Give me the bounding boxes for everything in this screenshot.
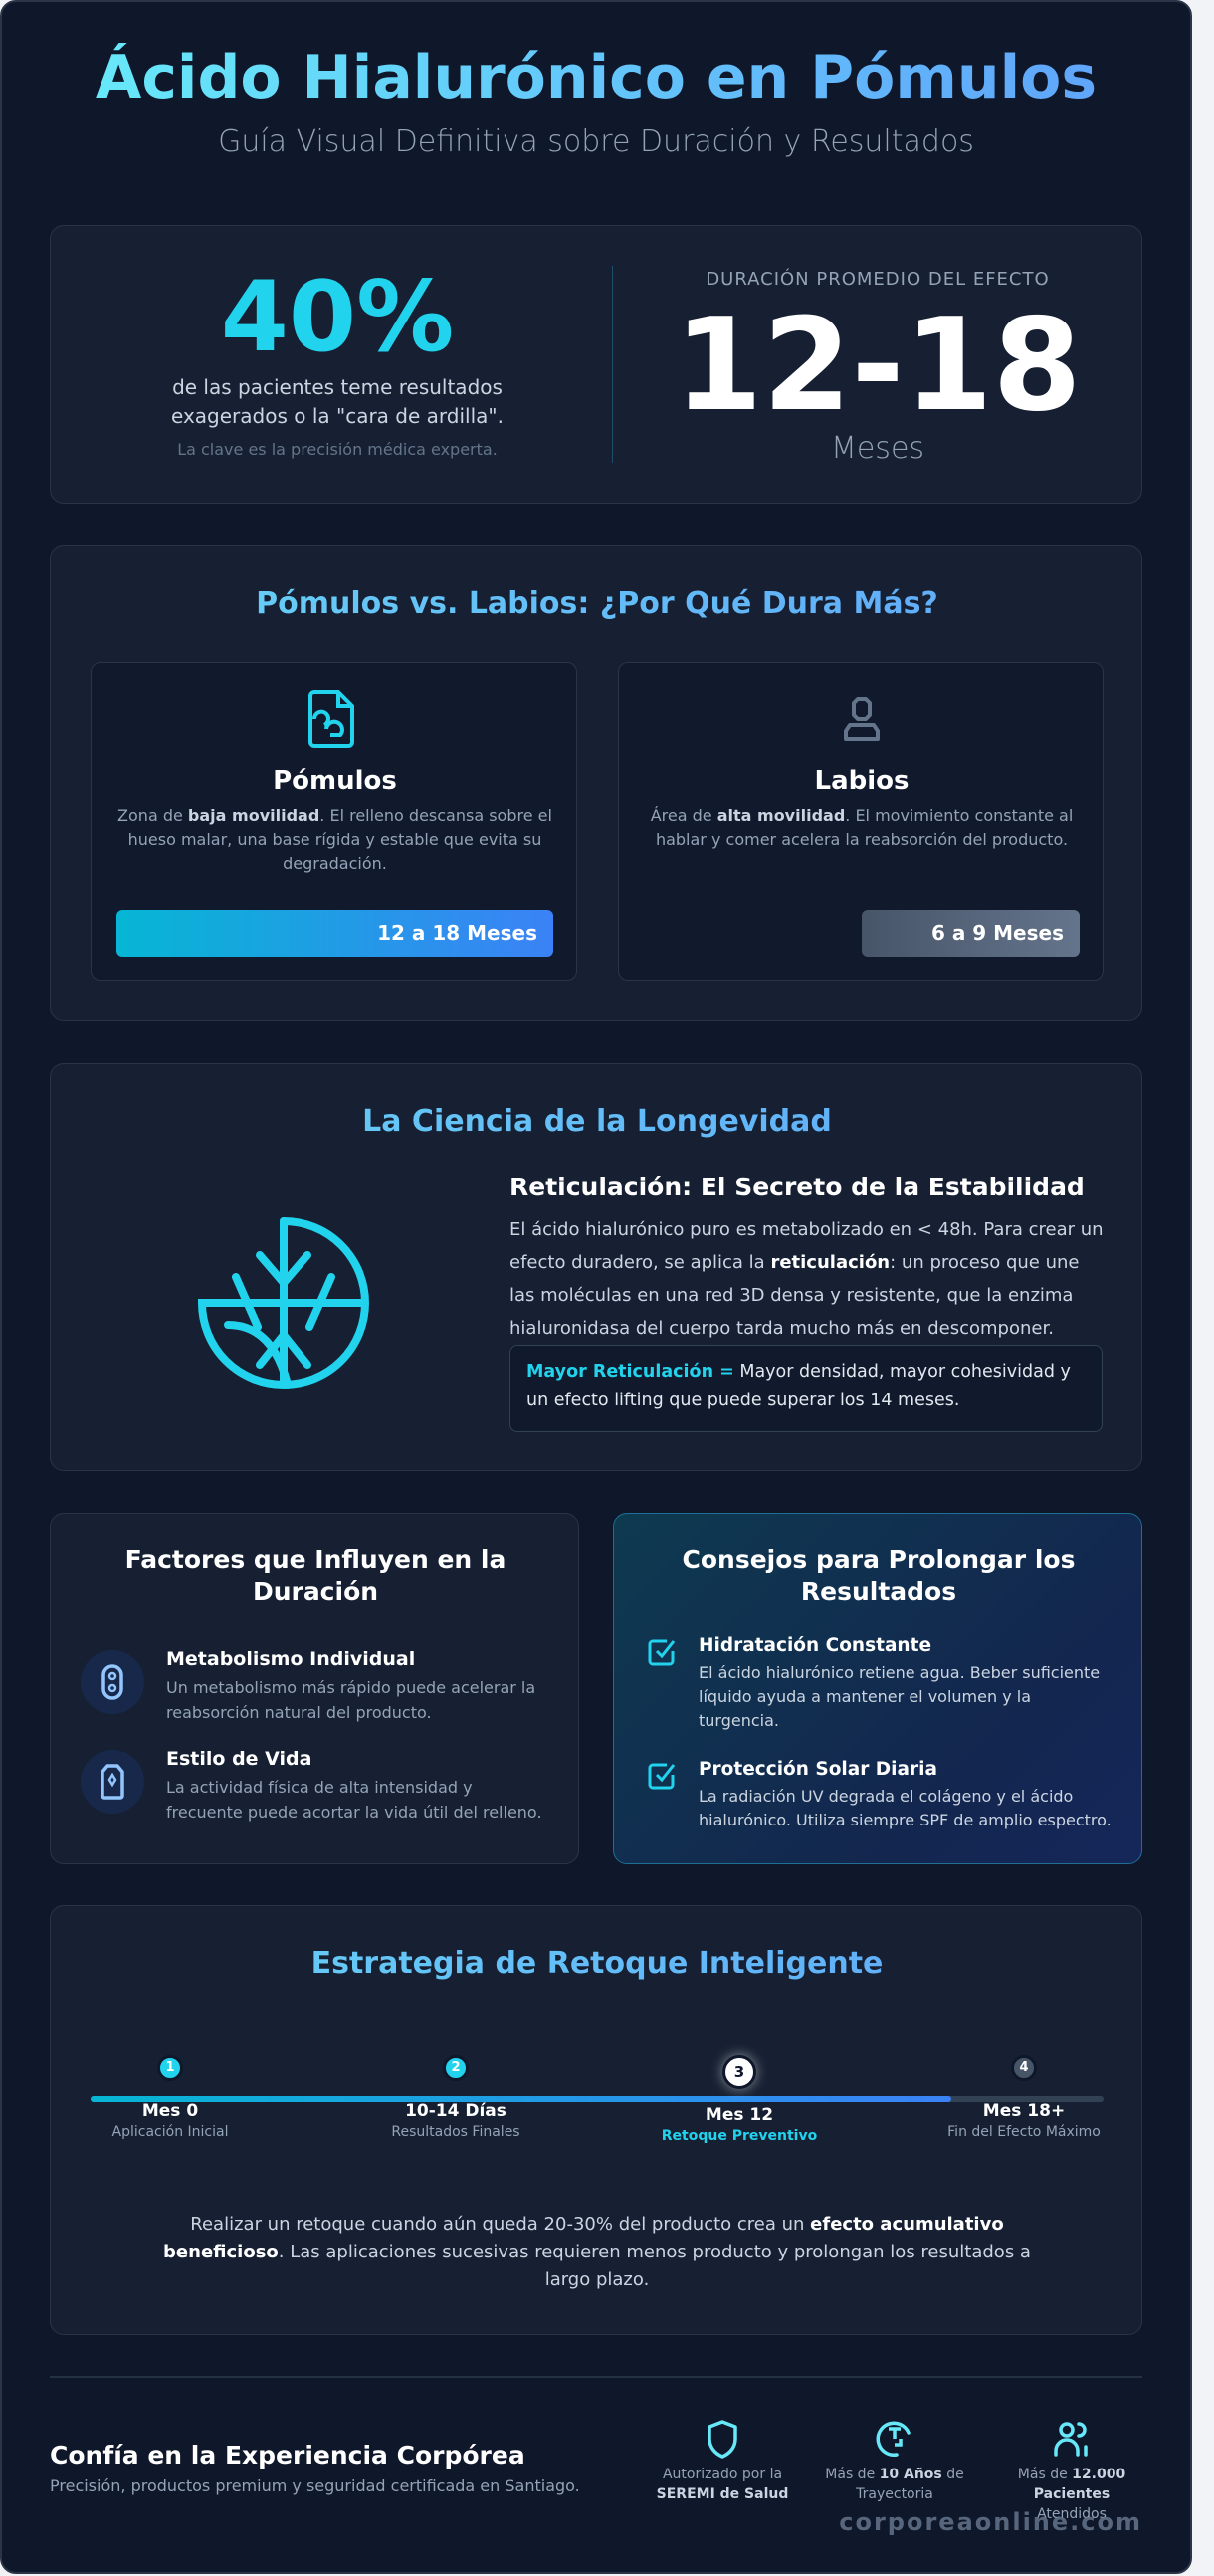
item: protección solar — [649, 1759, 1112, 1829]
item: estilo de vida: La actividad física de alta intensidad y frecuente puede acortar la vida útil del relleno. — [166, 1778, 542, 1822]
stat: 40%: exagerados o la "cara de ardilla". — [171, 404, 504, 428]
badge: 10 años: Trayectoria — [856, 2486, 933, 2502]
panel: cheeks vs lips — [50, 545, 1142, 1021]
step 3: Mes 12 — [706, 2105, 773, 2125]
badge: SEREMI — [657, 2420, 788, 2502]
icon: check — [649, 1764, 675, 1790]
stat: 40%: La clave es la precisión médica experta. — [177, 440, 498, 459]
badge: 12.000 pacientes — [1018, 2422, 1125, 2522]
heading: Pómulos — [273, 766, 397, 796]
heading: Labios — [814, 766, 909, 796]
step 4 — [947, 2055, 1101, 2140]
icon: metabolism — [81, 1650, 144, 1714]
badge: 12.000 pacientes: Atendidos — [1037, 2506, 1107, 2522]
panel: key stats — [50, 225, 1142, 504]
bar: 6 a 9 meses: 6 a 9 Meses — [931, 921, 1064, 945]
item: hidratación — [649, 1635, 1100, 1730]
stat: 12-18 months: DURACIÓN PROMEDIO DEL EFECTO — [706, 269, 1050, 290]
heading: Factores que Influyen en la Duración — [125, 1545, 506, 1606]
icon: snowflake/network — [198, 1217, 369, 1389]
heading: Pómulos vs. Labios: ¿Por Qué Dura Más? — [256, 586, 938, 621]
panel: science — [50, 1063, 1142, 1471]
paragraph: Realizar un retoque cuando aún queda 20-30% del producto crea un efecto acumulativo beneficioso. Las aplicaciones sucesivas requieren menos producto y prolongan los resultados a largo plazo. — [163, 2214, 1031, 2290]
description: Área de alta movilidad. El movimiento constante al hablar y comer acelera la reabsorción del producto. — [651, 806, 1073, 849]
icon: cheek file — [308, 690, 354, 748]
stat: 12-18 months: 12-18 — [674, 292, 1082, 440]
step 4: 4 — [1019, 2060, 1029, 2075]
title: Ácido Hialurónico en Pómulos — [96, 43, 1097, 112]
step 1: Mes 0 — [142, 2101, 198, 2121]
description: Zona de baja movilidad. El relleno descansa sobre el hueso malar, una base rígida y estable que evita su degradación. — [117, 806, 552, 873]
badge: 10 años — [825, 2421, 964, 2502]
paragraph: El ácido hialurónico puro es metabolizado en < 48h. Para crear un efecto duradero, se aplica la reticulación: un proceso que une las moléculas en una red 3D densa y resistente, que la enzima hialuronidasa del cuerpo tarda mucho más en descomponer. — [509, 1219, 1104, 1339]
badge: 12.000 pacientes: Pacientes — [1034, 2486, 1110, 2502]
panel: factors — [50, 1513, 579, 1864]
step 1: 1 — [165, 2060, 175, 2075]
card: pómulos — [91, 662, 577, 981]
step 2 — [391, 2055, 520, 2140]
panel: retouch strategy — [50, 1905, 1142, 2335]
item: metabolismo: Un metabolismo más rápido puede acelerar la reabsorción natural del producto. — [166, 1678, 535, 1722]
timeline — [91, 2048, 1104, 2144]
stat: 12-18 months: Meses — [831, 431, 924, 466]
icon: check — [649, 1640, 675, 1666]
item: protección solar: Protección Solar Diaria — [699, 1759, 937, 1780]
item: hidratación: Hidratación Constante — [699, 1635, 931, 1656]
callout — [509, 1345, 1103, 1432]
heading: La Ciencia de la Longevidad — [362, 1104, 832, 1139]
heading: Estrategia de Retoque Inteligente — [311, 1946, 883, 1981]
item: estilo de vida — [81, 1748, 542, 1822]
step 3: Retoque Preventivo — [662, 2128, 817, 2144]
item: metabolismo — [81, 1648, 535, 1722]
step 4: Mes 18+ — [983, 2101, 1065, 2121]
callout: Mayor Reticulación = Mayor densidad, mayor cohesividad y un efecto lifting que puede superar los 14 meses. — [526, 1362, 1071, 1410]
item: hidratación: El ácido hialurónico retiene agua. Beber suficiente líquido ayuda a mantener el volumen y la turgencia. — [699, 1663, 1100, 1730]
item: metabolismo: Metabolismo Individual — [166, 1648, 415, 1670]
stat: 40% — [171, 261, 504, 459]
icon: lips person — [844, 697, 880, 741]
badge: SEREMI: Autorizado por la — [663, 2467, 782, 2482]
card: labios — [618, 662, 1104, 981]
step 1 — [111, 2055, 228, 2140]
bar: 6 a 9 meses — [862, 910, 1080, 957]
step 2: 2 — [451, 2060, 461, 2075]
heading — [51, 584, 1143, 624]
badge: 10 años: Más de 10 Años de — [825, 2467, 964, 2482]
bar: 12 a 18 meses: 12 a 18 Meses — [377, 921, 537, 945]
badge: 12.000 pacientes: Más de 12.000 — [1018, 2467, 1125, 2482]
step 2: 10-14 Días — [405, 2101, 506, 2121]
panel: tips — [613, 1513, 1142, 1864]
bar: 12 a 18 meses — [116, 910, 553, 957]
heading — [51, 1944, 1143, 1984]
watermark: corporeaonline.com — [839, 2508, 1142, 2536]
step 3: 3 — [734, 2063, 744, 2081]
step 1: Aplicación Inicial — [112, 2124, 228, 2140]
stat: 40%: de las pacientes teme resultados — [172, 375, 503, 399]
subtitle: Guía Visual Definitiva sobre Duración y Resultados — [218, 124, 974, 159]
step 4: Fin del Efecto Máximo — [947, 2124, 1101, 2140]
item: protección solar: La radiación UV degrada el colágeno y el ácido hialurónico. Utiliza siempre SPF de amplio espectro. — [699, 1787, 1112, 1829]
stat: 40%: 40% — [221, 261, 454, 374]
item: estilo de vida: Estilo de Vida — [166, 1748, 311, 1770]
footer: trust: Precisión, productos premium y seguridad certificada en Santiago. — [50, 2476, 580, 2495]
heading: reticulación: Reticulación: El Secreto de la Estabilidad — [509, 1173, 1085, 1201]
badge: SEREMI: SEREMI de Salud — [657, 2486, 788, 2502]
heading — [51, 1102, 1143, 1142]
footer: trust — [50, 2441, 580, 2495]
step 2: Resultados Finales — [391, 2124, 520, 2140]
step 3 — [662, 2048, 817, 2144]
footer: trust: Confía en la Experiencia Corpórea — [50, 2441, 525, 2469]
icon: lifestyle — [81, 1750, 144, 1814]
heading: Consejos para Prolongar los Resultados — [683, 1545, 1075, 1606]
